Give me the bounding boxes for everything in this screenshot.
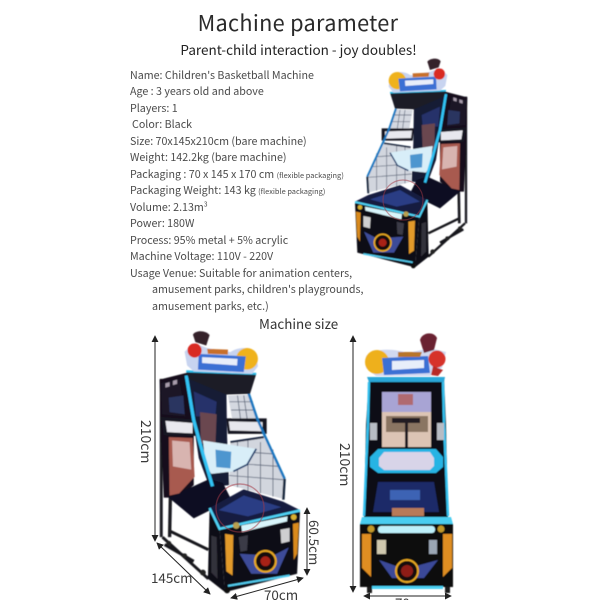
specification list: Weight: 142.2kg (bare machine) — [130, 150, 286, 165]
play ramp — [373, 482, 439, 512]
label: 210cm front: 210cm — [335, 443, 355, 486]
machine photo: front view — [360, 333, 453, 593]
control deck band — [360, 517, 453, 524]
specification list: Name: Children's Basketball Machine — [130, 68, 314, 82]
specification list: Age : 3 years old and above — [130, 84, 264, 99]
base light — [372, 586, 443, 589]
label: 210cm: 210cm — [136, 420, 156, 463]
amber side panels — [362, 534, 371, 577]
machine photo: angled view, with dimensions — [160, 331, 300, 593]
specification list: Power: 180W — [130, 216, 194, 231]
label: 60.5cm: 60.5cm — [305, 520, 325, 565]
game screen — [382, 392, 431, 447]
emblem — [379, 560, 438, 582]
stickers — [377, 540, 386, 554]
specification list: Machine Voltage: 110V - 220V — [130, 249, 273, 264]
specification list: Packaging : 70 x 145 x 170 cm (flexible packaging) — [130, 166, 344, 182]
specification list: amusement parks, etc.) — [152, 298, 269, 314]
specification list — [130, 68, 364, 314]
specification list: Players: 1 — [130, 100, 178, 116]
cabinet body — [364, 378, 448, 518]
specification list: amusement parks, children's playgrounds, — [152, 282, 364, 297]
label: 145cm: 145cm — [151, 567, 193, 587]
specification list: Process: 95% metal + 5% acrylic — [130, 232, 288, 248]
sign topper — [365, 333, 446, 376]
specification list: Packaging Weight: 143 kg (flexible packaging) — [130, 183, 325, 198]
specification list: Usage Venue: Suitable for animation centers, — [130, 266, 352, 280]
arrow: cabinet height — [306, 508, 308, 575]
arrow: depth — [157, 543, 210, 594]
subtitle: Parent-child interaction - joy doubles! — [180, 39, 417, 59]
specification list: Size: 70x145x210cm (bare machine) — [130, 134, 307, 148]
arrow: width, angled view — [231, 578, 303, 598]
specification list: Color: Black — [132, 117, 192, 132]
hoop glass — [370, 449, 443, 473]
lower cabinet — [360, 524, 453, 587]
light label — [378, 526, 435, 533]
title: Machine parameter — [198, 7, 398, 38]
arrow: height, angled view — [154, 336, 156, 541]
side placards — [370, 423, 377, 440]
section heading: machine size: Machine size — [259, 313, 338, 333]
arrow: width, front view — [364, 595, 451, 597]
machine photo: angled view, top — [355, 59, 467, 268]
arrow: height, front view — [352, 336, 354, 592]
specification list: Volume: 2.13m3 — [130, 198, 207, 214]
